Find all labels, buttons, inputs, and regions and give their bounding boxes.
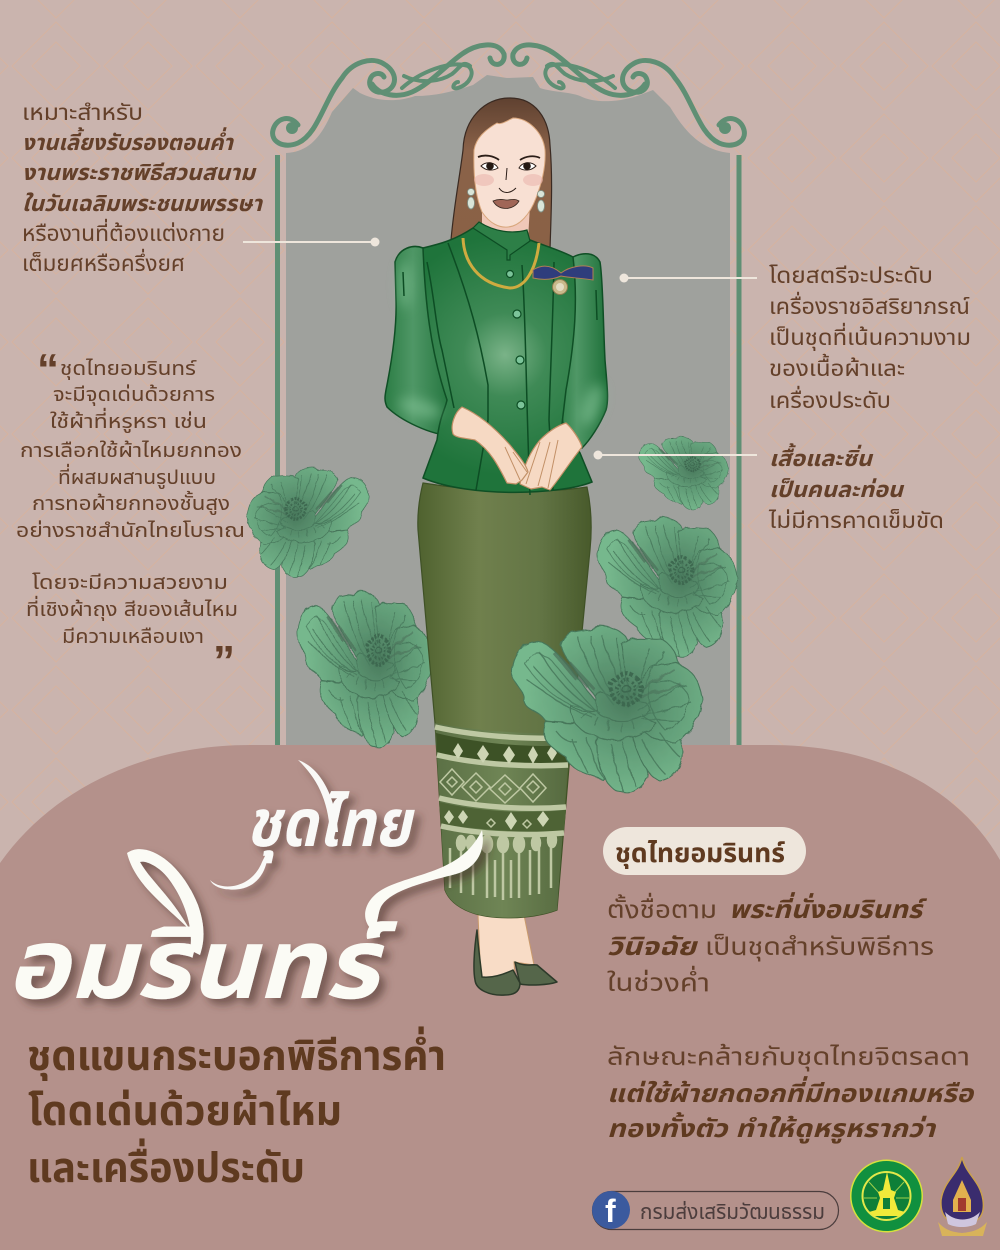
opening quote mark: “ xyxy=(37,345,59,394)
callout: accessories text: เครื่องประดับ xyxy=(769,385,891,413)
neck and face xyxy=(482,205,530,240)
callout: blouse and skirt text: เสื้อและซิ่น xyxy=(769,443,874,471)
sash bow and medal xyxy=(533,266,593,294)
callout: occasion text: เต็มยศหรือครึ่งยศ xyxy=(22,248,185,276)
flower: small right xyxy=(639,437,728,510)
logo: ministry crest xyxy=(938,1157,987,1236)
callout: blouse and skirt text: ไม่มีการคาดเข็มขัด xyxy=(768,508,944,533)
jacket body xyxy=(423,228,592,492)
frame pillars xyxy=(275,155,742,747)
description: naming xyxy=(607,892,934,997)
closing quote mark: ” xyxy=(213,637,235,686)
description: characteristics xyxy=(607,1043,974,1144)
leader line: upper right xyxy=(620,274,757,282)
subtitle: โดดเด่นด้วยผ้าไหม xyxy=(28,1087,342,1134)
facebook badge: กรมส่งเสริมวัฒนธรรม xyxy=(640,1200,825,1224)
ornament: left scroll xyxy=(273,45,504,145)
callout: blouse and skirt text xyxy=(768,443,944,533)
callout: blouse and skirt text: เป็นคนละท่อน xyxy=(769,477,905,502)
callout: accessories text: เป็นชุดที่เน้นความงาม xyxy=(769,322,971,351)
quote block: การทอผ้ายกทองชั้นสูง xyxy=(32,490,230,516)
facebook badge xyxy=(592,1191,838,1230)
callout: accessories text: โดยสตรีจะประดับ xyxy=(769,263,933,288)
callout: occasion text xyxy=(22,100,263,276)
callout: occasion text: ในวันเฉลิมพระชนมพรรษา xyxy=(22,191,263,216)
hands xyxy=(452,407,582,490)
leader line: left xyxy=(243,238,380,246)
jacket seams xyxy=(403,243,597,495)
legs xyxy=(478,915,534,982)
description: naming: ในช่วงค่ำ xyxy=(607,965,710,997)
description: naming: พระที่นั่งอมรินทร์ xyxy=(729,892,928,924)
description: characteristics: ทองทั้งตัว ทำให้ดูหรูหรากว่า xyxy=(607,1112,936,1144)
quote block: จะมีจุดเด่นด้วยการ xyxy=(53,383,215,406)
flower: upper left xyxy=(247,468,369,578)
callout: occasion text: งานเลี้ยงรับรองตอนค่ำ xyxy=(22,127,234,155)
title: อมรินทร์: อมรินทร์ xyxy=(6,909,398,1019)
description: naming: เป็นชุดสำหรับพิธีการ xyxy=(705,933,934,962)
quote block: ที่เชิงผ้าถุง สีของเส้นไหม xyxy=(26,595,238,621)
quote block: มีความเหลือบเงา xyxy=(62,626,204,648)
face features xyxy=(474,156,543,209)
callout: accessories text: เครื่องราชอิสริยาภรณ์ xyxy=(769,291,970,319)
label pill: ชุดไทยอมรินทร์ xyxy=(615,838,785,869)
quote block: อย่างราชสำนักไทยโบราณ xyxy=(16,519,245,542)
arch panel xyxy=(286,75,730,745)
description: naming: วินิจฉัย xyxy=(607,933,699,961)
callout: accessories text: ของเนื้อผ้าและ xyxy=(769,353,905,381)
callout: accessories text xyxy=(769,263,971,413)
quote block: โดยจะมีความสวยงาม xyxy=(32,572,228,594)
title: ชุดไทย xyxy=(210,760,415,890)
shoes xyxy=(474,930,557,995)
flower: foreground large xyxy=(512,626,702,793)
quote block: ที่ผสมผสานรูปแบบ xyxy=(58,463,216,490)
hair xyxy=(451,98,552,250)
subtitle: ชุดแขนกระบอกพิธีการค่ำ xyxy=(27,1026,446,1081)
skirt hem pattern xyxy=(435,723,570,918)
jacket highlights xyxy=(397,261,608,429)
description: characteristics: ลักษณะคล้ายกับชุดไทยจิตรลดา xyxy=(607,1043,970,1072)
icon: facebook: f xyxy=(605,1193,616,1229)
subtitle xyxy=(27,1026,446,1191)
quote block: การเลือกใช้ผ้าไหมยกทอง xyxy=(20,439,242,462)
subtitle: และเครื่องประดับ xyxy=(27,1138,305,1191)
logo: department seal xyxy=(850,1160,923,1232)
callout: occasion text: เหมาะสำหรับ xyxy=(22,100,143,125)
ornament: right scroll xyxy=(513,45,744,145)
description: naming: ตั้งชื่อตาม xyxy=(607,892,717,924)
title: ชุดไทย: ชุดไทย xyxy=(246,786,415,864)
flower: mid right xyxy=(597,517,737,657)
gold necklace xyxy=(463,238,539,288)
buttons xyxy=(506,270,525,409)
quote block: ชุดไทยอมรินทร์ xyxy=(60,358,197,380)
icon: facebook xyxy=(592,1191,630,1229)
callout: occasion text: งานพระราชพิธีสวนสนาม xyxy=(22,160,257,185)
quote block: ใช้ผ้าที่หรูหรา เช่น xyxy=(50,407,207,434)
bottom mound xyxy=(0,745,1000,1250)
leader line: lower right xyxy=(594,450,757,460)
label pill xyxy=(603,827,806,875)
title: อมรินทร์ xyxy=(6,830,483,1019)
quote block xyxy=(16,345,245,686)
earrings xyxy=(468,188,544,212)
figure xyxy=(385,98,608,995)
jacket sleeves xyxy=(385,247,608,448)
collar xyxy=(473,222,530,260)
description: characteristics: แต่ใช้ผ้ายกดอกที่มีทองแกมหรือ xyxy=(607,1076,974,1108)
flower: lower left xyxy=(297,591,432,748)
skirt xyxy=(418,483,591,918)
callout: occasion text: หรืองานที่ต้องแต่งกาย xyxy=(22,218,225,246)
